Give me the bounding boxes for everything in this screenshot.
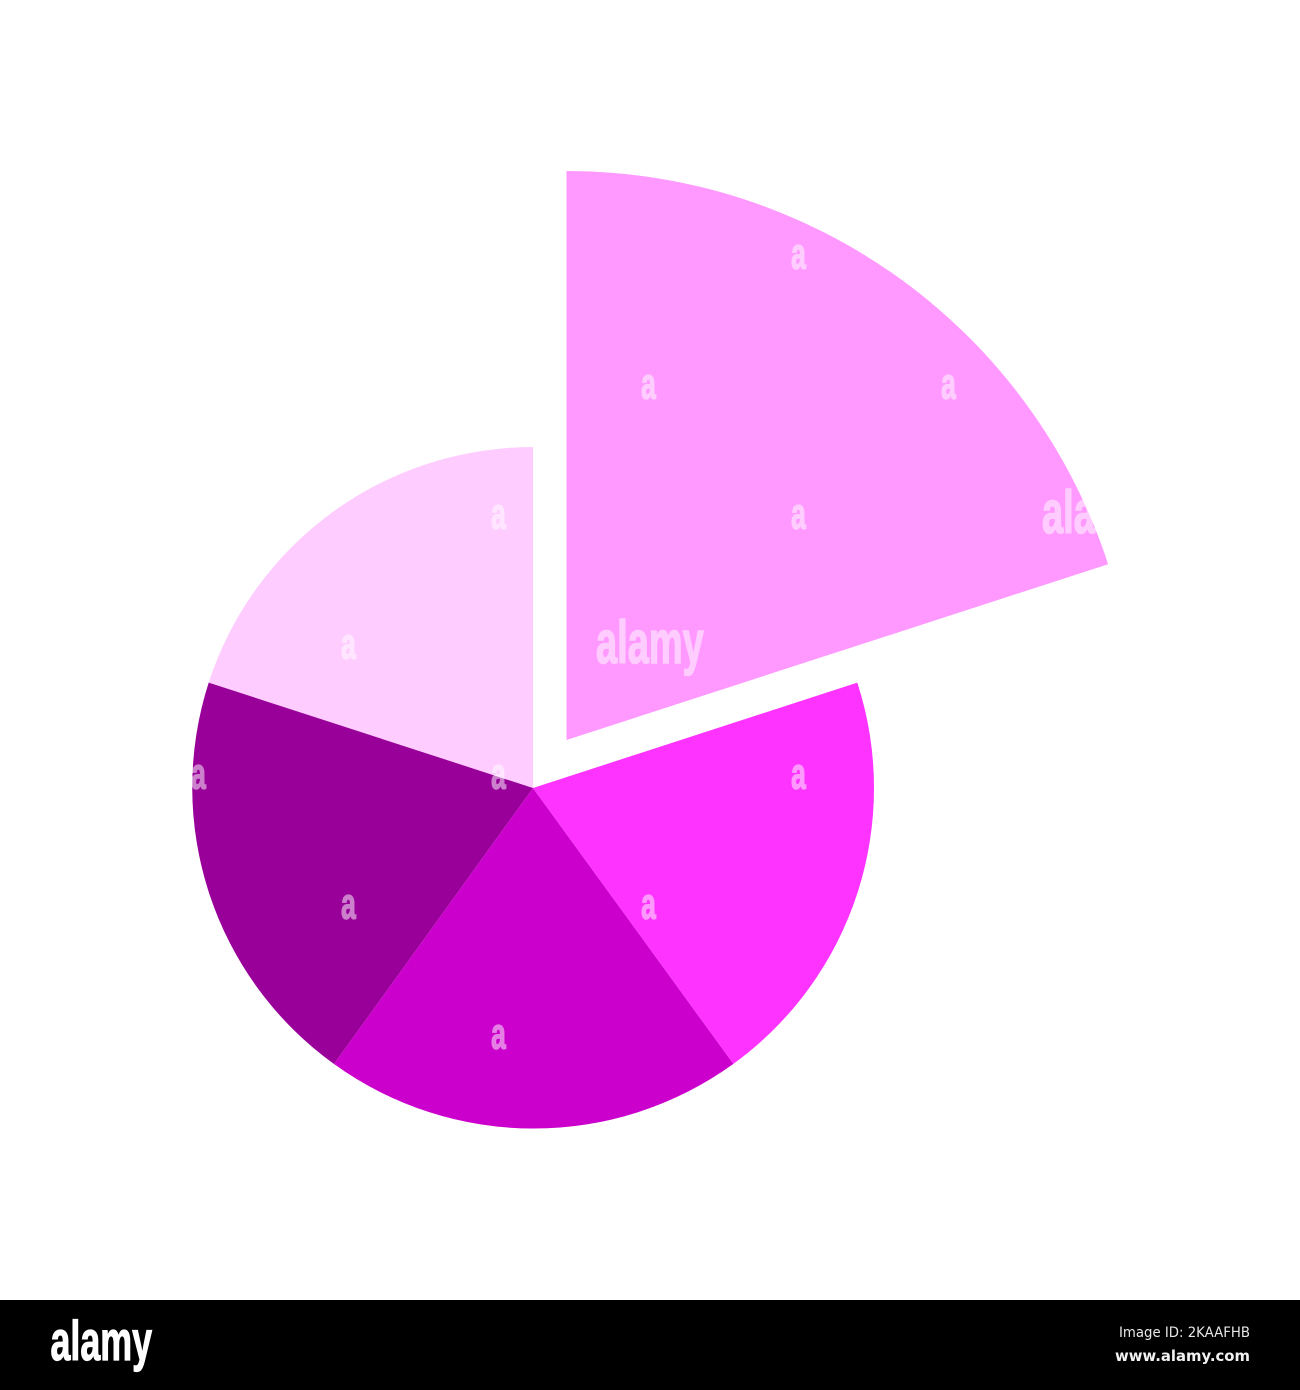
- watermark pattern: a: [491, 1008, 506, 1058]
- footer bar: [0, 1300, 1300, 1390]
- watermark pattern: a: [191, 748, 206, 798]
- watermark pattern: a: [641, 878, 656, 928]
- slice: magenta, bottom: [334, 788, 733, 1129]
- image id: Image ID: 2KAAFHB: [1119, 1325, 1250, 1341]
- watermark pattern: a: [341, 878, 356, 928]
- watermark pattern: a: [791, 488, 806, 538]
- watermark pattern: a: [791, 748, 806, 798]
- watermark pattern: a: [941, 358, 956, 408]
- watermark pattern: a: [341, 618, 356, 668]
- slice: exploded light pink sector: [566, 171, 1108, 740]
- watermark pattern: [191, 228, 1150, 1058]
- website url: www.alamy.com: [1115, 1347, 1250, 1365]
- watermark pattern: a: [491, 748, 506, 798]
- slice: bright magenta, lower right: [533, 683, 874, 1064]
- watermark pattern: alamy: [596, 609, 704, 676]
- pie chart: [192, 171, 1108, 1129]
- watermark pattern: alamy: [1042, 479, 1150, 546]
- slice: dark purple, lower left: [192, 683, 533, 1064]
- watermark pattern: a: [491, 488, 506, 538]
- watermark pattern: a: [791, 228, 806, 278]
- watermark pattern: a: [641, 358, 656, 408]
- slice: pale pink, top left: [209, 447, 533, 788]
- footer logo: alamy: [50, 1309, 152, 1372]
